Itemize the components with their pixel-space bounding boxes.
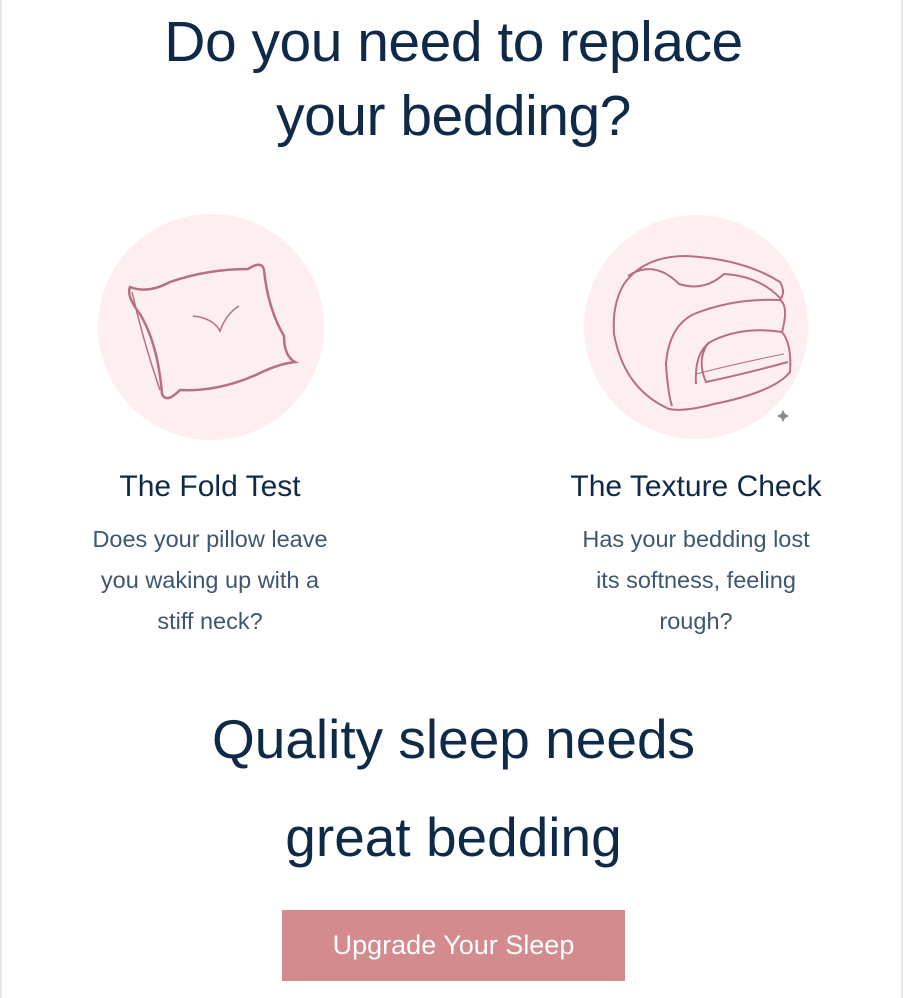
icon: folded comforter: [584, 215, 808, 439]
title: Do you need to replace: [164, 10, 743, 74]
tagline: [212, 708, 695, 868]
text: fold test: Does your pillow leave: [92, 526, 328, 552]
button: Upgrade Your Sleep: [333, 930, 574, 960]
heading: fold test: The Fold Test: [119, 470, 301, 503]
text: texture check: rough?: [659, 608, 733, 634]
text: fold test: you waking up with a: [101, 567, 319, 593]
tagline: great bedding: [285, 806, 622, 868]
heading: texture check: The Texture Check: [570, 470, 822, 503]
text: fold test: [92, 526, 328, 634]
text: texture check: its softness, feeling: [596, 567, 796, 593]
text: texture check: [582, 526, 810, 634]
button: [282, 910, 625, 981]
text: texture check: Has your bedding lost: [582, 526, 810, 552]
tagline: Quality sleep needs: [212, 708, 695, 770]
title: [164, 10, 743, 148]
title: your bedding?: [276, 84, 631, 148]
text: fold test: stiff neck?: [157, 608, 263, 634]
icon: pillow: [98, 214, 324, 440]
